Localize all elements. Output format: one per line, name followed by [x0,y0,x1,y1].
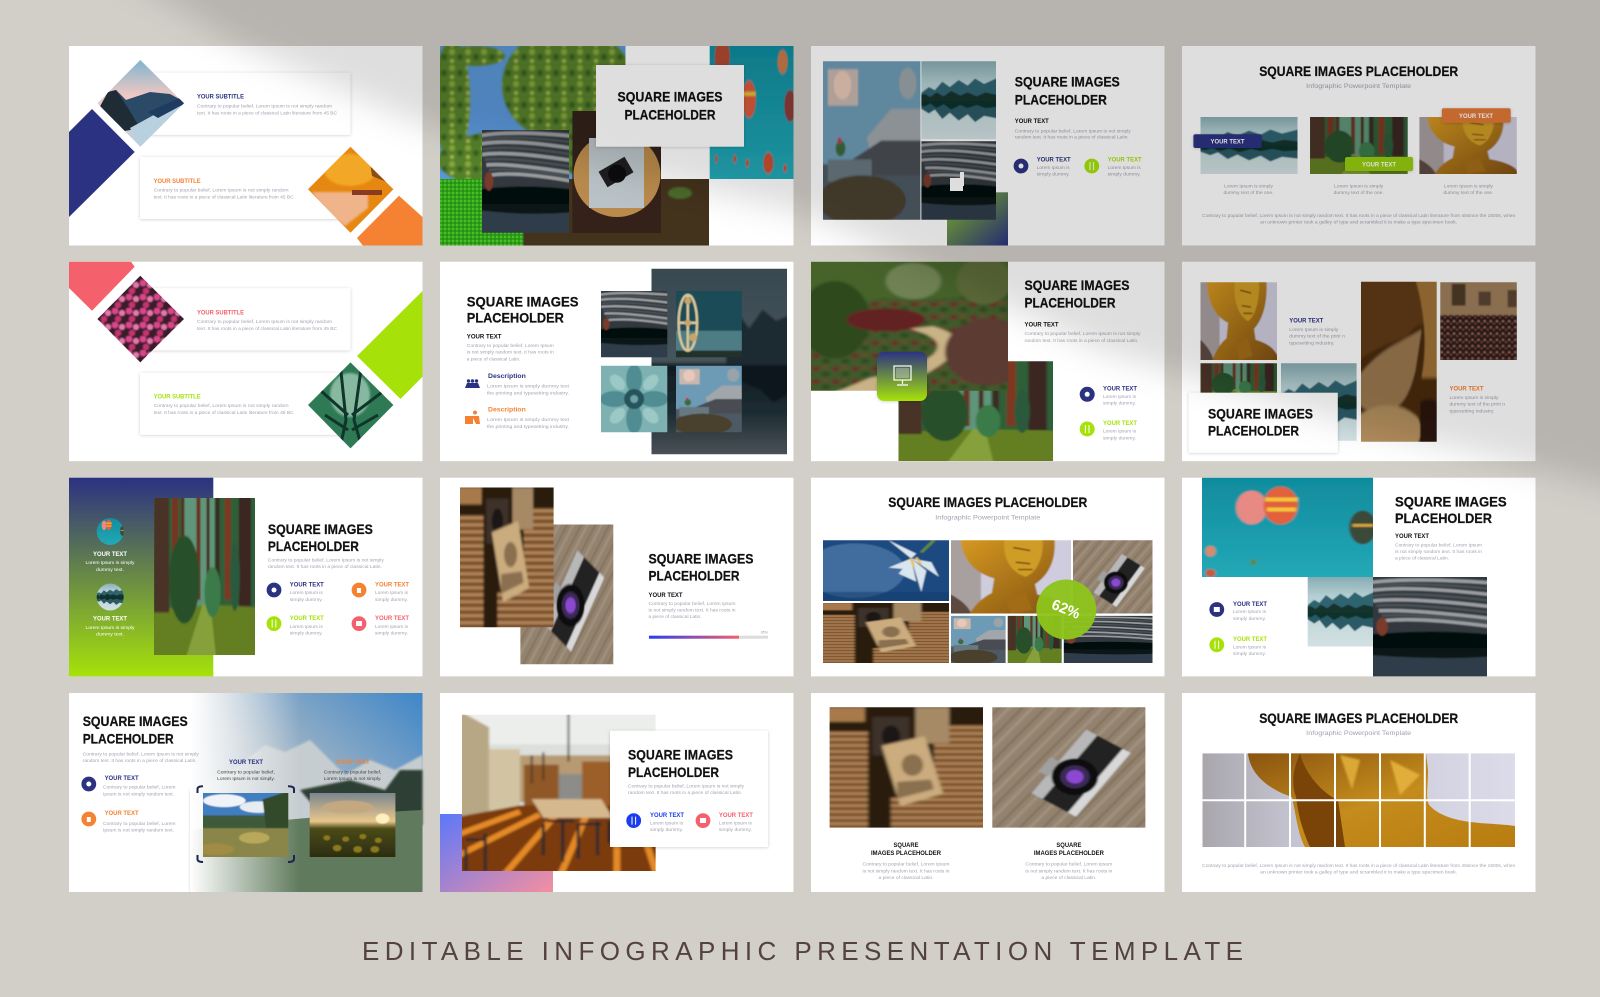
text column: right: is not simply random text. It has roots in [1025,868,1113,874]
photo: balloons [1193,473,1382,582]
photo: gold face [1415,114,1522,177]
item: blue [626,812,684,833]
item: desk: the printing and typesetting industry. [487,424,569,430]
heading: PLACEHOLDER [1024,294,1116,310]
item: navy: simply dummy. [1103,401,1136,407]
card: bottom [140,157,345,219]
item: lime: simply dummy. [290,630,323,636]
item: lime: simply dummy. [1103,435,1136,441]
footnote: Contrary to popular belief, Lorem Ipsum is not simply random text. It has roots in a piece of classical Latin literature from 45since the 1500s, when [1202,213,1516,219]
title card [610,731,768,847]
badge: navy [1193,134,1262,148]
photo: gold face [1197,278,1281,364]
item: orange: YOUR TEXT [375,581,409,588]
item: lime: YOUR TEXT [1103,420,1137,427]
item: lime: YOUR TEXT [1233,636,1267,643]
heading [467,294,578,326]
item: lime: YOUR TEXT [1108,157,1142,164]
heading [648,550,754,584]
item: orange: YOUR TEXT [105,810,139,817]
paragraph: random text. It has roots in a piece of classical Latin. [628,790,742,796]
paragraph: random text. It has roots in a piece of classical Latin. [268,564,382,570]
caption: navy: Lorem Ipsum is not simply. [217,776,275,782]
text block: navy: Lorem Ipsum is simply [1289,327,1339,333]
slide 16: grid-split gold photo [1182,693,1536,892]
text block: a piece of classical Latin. [1395,556,1449,562]
photo: boats [478,125,573,238]
text block: is not simply random text. It has roots in [467,350,554,356]
photo: small camera print [589,138,644,208]
text block: YOUR TEXT [1024,321,1059,328]
heading: SQUARE IMAGES PLACEHOLDER [888,494,1087,510]
caption: lower [86,616,135,638]
text column: left: IMAGES PLACEHOLDER [871,850,941,857]
item: orange [81,810,176,834]
photo: lake [1304,574,1376,650]
captions [1224,183,1494,196]
caption: upper: dummy text. [96,567,124,573]
item: lime: simply dummy. [1108,172,1141,178]
circle photo: balloons [96,518,124,545]
badge: orange: YOUR TEXT [1459,113,1493,120]
heading: Infographic Powerpoint Template [1306,730,1412,737]
item: navy: Lorem Ipsum is [1037,165,1070,171]
heading [1395,493,1507,526]
photo: forest [149,490,260,663]
paragraph: Contrary to popular belief, Lorem Ipsum is not simply [83,751,199,757]
slide 12: balloons collage [1182,473,1536,681]
badge: navy: YOUR TEXT [1210,138,1245,146]
heading: PLACEHOLDER [83,730,174,746]
title box: PLACEHOLDER [624,106,716,122]
item: navy: simply dummy. [1037,172,1070,178]
photo: forest path [891,356,1061,466]
photo: lake [1196,114,1302,177]
footnote: Contrary to popular belief, Lorem Ipsum is not simply random text. It has roots in a piece of classical Latin literature from 45since the 1500s, when [1202,863,1516,869]
title box: SQUARE IMAGES [618,89,722,105]
heading: SQUARE IMAGES [648,550,754,566]
photo: room [948,614,1008,665]
badge: lime: YOUR TEXT [1362,161,1396,168]
slide 4: three photos with badges [1182,46,1536,246]
heading: PLACEHOLDER [648,568,740,584]
photo: cards [817,600,955,666]
text block: orange: Lorem Ipsum is simply [1450,395,1499,401]
text block: Contrary to popular belief, Lorem Ipsum is not simply [1015,128,1131,134]
window light shadow overlay [70,0,1600,510]
slide 5: subtitle diamonds pink [69,262,422,461]
text column: right [1025,842,1113,881]
photo: crowd [1436,278,1521,364]
photo: forest [1197,361,1281,405]
caption: navy [217,759,275,782]
captions: dummy text of the one. [1224,190,1274,196]
item: pink: YOUR TEXT [719,812,753,819]
slide 9: gradient panel with forest [69,478,422,676]
percent badge: 62% [1049,596,1082,623]
footnote [1202,213,1516,226]
photo: lily [804,537,955,604]
item: orange: Ipsum is not simply random text. [103,828,174,834]
text block: a piece of classical Latin. [648,614,702,620]
item: pink [352,615,409,636]
card: bottom: text. It has roots in a piece of classical Latin literature from 45 BC [154,194,294,200]
badge: orange [1442,108,1511,123]
title card [1189,393,1338,453]
badge: lime [1345,157,1413,171]
item: navy: YOUR TEXT [1103,386,1137,393]
heading: SQUARE IMAGES [467,294,578,310]
photo: succulent [598,362,671,436]
photo: mountain diamond [97,60,185,148]
text block: orange: YOUR TEXT [1450,385,1484,392]
heading: PLACEHOLDER [467,310,564,326]
captions: dummy text of the one. [1443,190,1493,196]
heading: PLACEHOLDER [1395,510,1492,526]
photo: balloons [706,39,798,186]
text block: YOUR TEXT [648,592,683,599]
heading: SQUARE IMAGES [628,746,733,762]
heading [1259,63,1458,90]
caption: orange: Lorem Ipsum is not simply. [324,776,381,782]
photo: dark lake [645,259,794,464]
slide 11: photo mosaic with 62% [804,478,1164,676]
photo: room [818,53,925,228]
item: navy: Ipsum is not simply random text. [103,791,174,797]
item: navy [81,775,176,797]
text column: right: IMAGES PLACEHOLDER [1034,850,1104,857]
text block: is not simply random text. It has roots in [648,608,736,614]
item: navy: Lorem Ipsum is [290,590,323,596]
slide 1: subtitle diamonds navy [69,46,422,246]
item: lime: Lorem Ipsum is [1108,165,1141,171]
text block: orange: typesetting industry. [1450,408,1494,414]
item: navy: Contrary to popular belief, Lorem [103,785,176,791]
item: orange [352,581,409,603]
item: desk: Description [488,407,526,414]
text block: YOUR TEXT [1015,118,1049,125]
photo: lake [918,57,1000,143]
heading: Infographic Powerpoint Template [935,514,1041,521]
item: lime [1209,636,1267,657]
text block [1024,321,1141,344]
text column: left: Contrary to popular belief, Lorem Ipsum [862,861,950,867]
text block: Contrary to popular belief, Lorem Ipsum [1395,542,1482,548]
item: lime: simply dummy. [1233,651,1266,657]
item: navy: simply dummy. [1233,616,1266,622]
card: top [150,288,350,350]
item: pink: Lorem Ipsum is [375,624,409,630]
heading: SQUARE IMAGES PLACEHOLDER [1259,710,1458,726]
slide 15: two large photos [811,693,1164,892]
caption: orange: YOUR TEXT [336,759,370,766]
item: people: Lorem Ipsum is simply dummy text [487,384,570,390]
item: blue: simply dummy. [650,827,683,833]
title card: PLACEHOLDER [1208,423,1299,439]
text block: YOUR TEXT [1395,533,1429,540]
heading: PLACEHOLDER [268,538,359,554]
item: desk [465,407,570,430]
text column: right: Contrary to popular belief, Lorem Ipsum [1025,861,1112,867]
slide 10: cards and camera with progress [440,478,794,676]
heading [628,746,733,780]
item: lime [1084,157,1142,178]
slide 14: kitchen with title card [440,693,794,892]
heading: PLACEHOLDER [1015,91,1107,107]
heading [1024,277,1130,310]
slide 7: garden photo with icon tile [799,255,1164,466]
captions: Lorem Ipsum is simply [1334,183,1384,189]
caption: lower: dummy text. [96,632,124,638]
caption: upper: YOUR TEXT [93,551,127,558]
captions: Lorem Ipsum is simply [1224,183,1274,189]
orange corner shape [357,196,422,246]
caption: navy: YOUR TEXT [229,759,263,766]
text block: YOUR TEXT [467,333,502,340]
gradient square [947,192,1008,246]
text block: a piece of classical Latin. [467,356,520,362]
gradient square [440,814,553,892]
photo: valley [197,790,293,860]
caption: lower: YOUR TEXT [93,616,127,623]
card: top [150,73,350,135]
card: bottom: YOUR SUBTITLE [154,394,201,401]
text block: Contrary to popular belief, Lorem Ipsum is not simply [1024,331,1141,337]
photo: green trees diamond [308,362,394,449]
heading [1015,74,1120,107]
heading: SQUARE IMAGES [1395,493,1507,509]
item: orange: Contrary to popular belief, Lorem [103,821,176,827]
paragraph: random text. It has roots in a piece of classical Latin. [83,758,197,764]
card: top: text. It has roots in a piece of classical Latin literature from 45 BC [197,110,338,116]
item: navy [1014,157,1071,178]
item: navy: YOUR TEXT [290,581,324,588]
caption: lower: Lorem Ipsum is simply [86,625,135,631]
photo: room [673,362,745,436]
paragraph: Contrary to popular belief, Lorem Ipsum is not simply [268,557,385,563]
navy diagonal shape [69,109,135,217]
slide 8: gallery with title card [1182,262,1536,461]
item: navy: simply dummy. [290,597,323,603]
item: navy [1209,601,1267,622]
caption: upper: Lorem Ipsum is simply [86,560,135,566]
item: navy [1080,386,1137,407]
photo: ferris wheel [673,288,745,361]
paragraph [268,557,385,570]
heading: SQUARE IMAGES PLACEHOLDER [1259,63,1458,79]
footer title: EDITABLE INFOGRAPHIC PRESENTATION TEMPLATE [362,936,1243,966]
photo: jungle garden [799,255,1032,397]
photo: boats with icon [918,137,1000,224]
text block: orange: dummy text of the print n [1450,402,1505,408]
item: pink: YOUR TEXT [375,615,409,622]
text block: random text. It has roots in a piece of classical Latin. [1024,338,1138,344]
text block: random text. It has roots in a piece of classical Latin. [1015,134,1129,140]
title box [596,65,744,147]
photo: autumn diamond [308,146,394,234]
card: top: text. It has roots in a piece of classical Latin literature from 45 BC [197,326,338,332]
photo: forest [1305,114,1413,177]
photo: cat [1357,274,1440,450]
heading: SQUARE IMAGES [83,713,188,729]
photo: boats [598,288,671,361]
photo grid [1202,753,1516,847]
item: navy: YOUR TEXT [105,775,139,782]
card: top: Contrary to popular belief, Lorem Ipsum is not simply random [197,104,332,110]
item: navy: Lorem Ipsum is [1103,394,1137,400]
photo: camera [985,701,1153,834]
photo: cards [822,701,991,834]
text block: Contrary to popular belief, Lorem Ipsum [467,343,554,349]
item: navy: YOUR TEXT [1037,157,1071,164]
card: bottom: text. It has roots in a piece of classical Latin literature from 45 BC [154,410,294,416]
footnote: an unknown printer took a galley of type and scrambled it to make a type specimen book. [1260,220,1457,226]
text block: navy: YOUR TEXT [1289,318,1323,325]
percent badge [1036,580,1096,640]
gradient panel [69,478,213,676]
photo: pink flowers diamond [98,276,184,362]
photo: forest [1005,614,1064,665]
text column: left: is not simply random text. It has roots in [862,868,950,874]
heading: SQUARE IMAGES [1015,74,1120,90]
photo: camera [516,518,618,671]
icon tile: monitor [877,352,927,401]
text column: left: SQUARE [894,842,919,849]
item: people [465,373,570,397]
item: lime: Lorem Ipsum is [1233,644,1267,650]
photo: tree canopy [440,46,626,179]
text block: orange [1450,385,1505,414]
item: people: the printing and typesetting industry. [487,391,569,397]
slide 3: room collage [811,46,1164,246]
photo: landscape background with fade [190,693,422,892]
caption: navy: Contrary to popular belief, [217,770,275,776]
photo: boats [1059,614,1157,665]
slide 6: description with collage [440,259,794,464]
item: pink [696,812,753,833]
item: lime [267,615,324,636]
lime shape [357,291,422,399]
text column: right: a piece of classical Latin. [1041,875,1096,881]
photo: cards [455,481,558,634]
captions: Lorem Ipsum is simply [1444,183,1494,189]
card: bottom: Contrary to popular belief, Lorem Ipsum is not simply random [154,403,289,409]
heading: SQUARE IMAGES [268,521,373,537]
text column: left: a piece of classical Latin. [878,875,934,881]
item: pink: simply dummy. [375,630,408,636]
card: bottom: YOUR SUBTITLE [154,178,201,185]
circle photo: lake [96,584,124,610]
item: blue: Lorem Ipsum is [650,820,684,826]
heading [83,713,188,746]
text column: left [862,842,950,881]
photo: green grass [440,179,524,246]
heading: Infographic Powerpoint Template [1306,83,1412,90]
text block [1395,533,1482,562]
item: people: Description [488,373,526,380]
slide 13: landscape with framed photos [69,693,422,892]
caption: orange: Contrary to popular belief, [324,770,381,776]
progress bar [649,631,769,639]
heading: PLACEHOLDER [628,764,719,780]
text block: is not simply random text. It has roots in [1395,549,1482,555]
heading [1259,710,1458,737]
item: desk: Lorem Ipsum is simply dummy text [487,417,570,423]
photo: brown earth [524,179,709,246]
footnote [1202,863,1516,876]
text block: Contrary to popular belief, Lorem Ipsum [648,601,736,607]
text block: navy [1289,318,1345,346]
corner brackets [198,786,294,862]
photo: sunflowers [305,790,400,860]
item: navy: YOUR TEXT [1233,601,1267,608]
item: pink: simply dummy. [719,827,752,833]
item: lime: YOUR TEXT [290,615,324,622]
paragraph [83,751,199,764]
item: lime: Lorem Ipsum is [290,624,323,630]
caption: orange [324,759,381,782]
item: blue: YOUR TEXT [650,812,684,819]
text column: right: SQUARE [1056,842,1082,849]
slide 2: title over collage [440,46,794,246]
photo: camera [1069,537,1156,617]
card: bottom [140,373,345,435]
card: top: YOUR SUBTITLE [197,94,245,101]
item: lime: Lorem Ipsum is [1103,429,1137,435]
card: bottom: Contrary to popular belief, Lorem Ipsum is not simply random [154,188,289,194]
text block [467,333,554,362]
photo: gold face [945,537,1077,617]
photo: lake [1277,359,1360,445]
pink corner shape [69,262,135,311]
item: orange: simply dummy. [375,597,408,603]
item: orange: Lorem Ipsum is [375,590,409,596]
photo: wood table with round board [572,111,661,233]
heading: SQUARE IMAGES [1024,277,1130,293]
item: navy: Lorem Ipsum is [1233,609,1267,615]
footnote: an unknown printer took a galley of type and scrambled it to make a type specimen book. [1260,870,1457,876]
text block [1015,118,1131,140]
item: lime [1080,420,1137,441]
photo: kitchen [452,707,665,879]
card: top: YOUR SUBTITLE [197,309,245,316]
caption: upper [86,551,135,573]
title card: SQUARE IMAGES [1208,405,1313,421]
text block: navy: dummy text of the print n [1289,334,1345,340]
paragraph: Contrary to popular belief, Lorem Ipsum is not simply [628,784,745,790]
heading [268,521,373,554]
heading [888,494,1087,521]
item: pink: Lorem Ipsum is [719,820,752,826]
text block: navy: typesetting industry. [1289,340,1334,346]
progress bar: 85% [761,631,769,635]
photo: boats [1367,572,1493,681]
item: navy [267,581,324,603]
paragraph [628,784,745,796]
card: top: Contrary to popular belief, Lorem Ipsum is not simply random [197,319,332,325]
text block [648,592,736,620]
captions: dummy text of the one. [1334,190,1384,196]
